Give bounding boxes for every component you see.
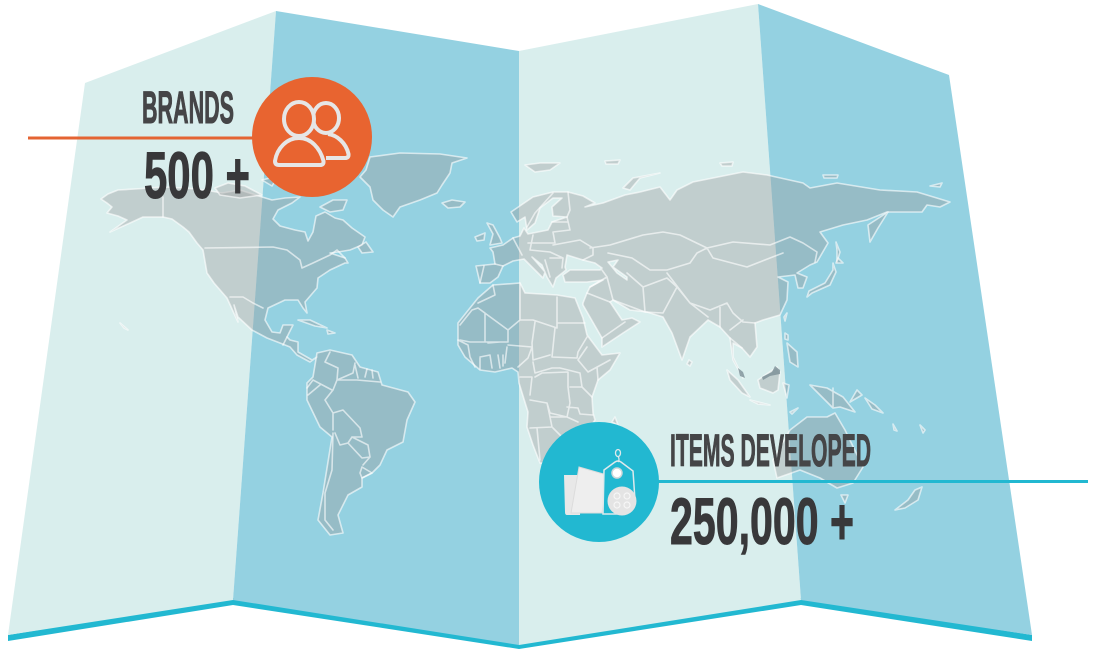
north america	[101, 187, 365, 362]
world map	[101, 153, 950, 535]
arctic islands, newfoundland and caribbean	[120, 176, 373, 334]
icon: people	[252, 77, 372, 197]
brands value: 500 +	[144, 138, 250, 212]
brands callout	[28, 77, 372, 212]
africa borders	[458, 283, 610, 460]
iceland	[442, 200, 465, 208]
south america	[307, 350, 415, 535]
brands leader line	[28, 136, 254, 140]
eurasia	[476, 172, 950, 378]
south america borders	[307, 352, 380, 530]
items value: 250,000 +	[670, 484, 854, 558]
australia	[773, 413, 863, 488]
items developed callout: ITEMS DEVELOPED	[670, 425, 871, 476]
malaysia dark highlights	[738, 366, 780, 380]
greenland	[360, 153, 467, 217]
africa	[458, 283, 620, 463]
eurasia borders	[480, 192, 817, 348]
new guinea and pacific islands	[810, 385, 925, 433]
sri lanka and southeast asian islands	[687, 313, 798, 414]
brands callout: BRANDS	[142, 82, 234, 133]
north america borders	[163, 197, 345, 345]
kamchatka and sakhalin	[836, 212, 888, 262]
russian and arctic islands	[525, 160, 942, 190]
tasmania and new zealand	[841, 487, 922, 510]
madagascar tip	[612, 417, 618, 425]
icon: bags, tag and button	[539, 422, 659, 542]
japan	[807, 258, 843, 297]
british isles	[475, 223, 502, 245]
items developed callout	[539, 422, 1088, 558]
items leader line	[655, 480, 1088, 483]
